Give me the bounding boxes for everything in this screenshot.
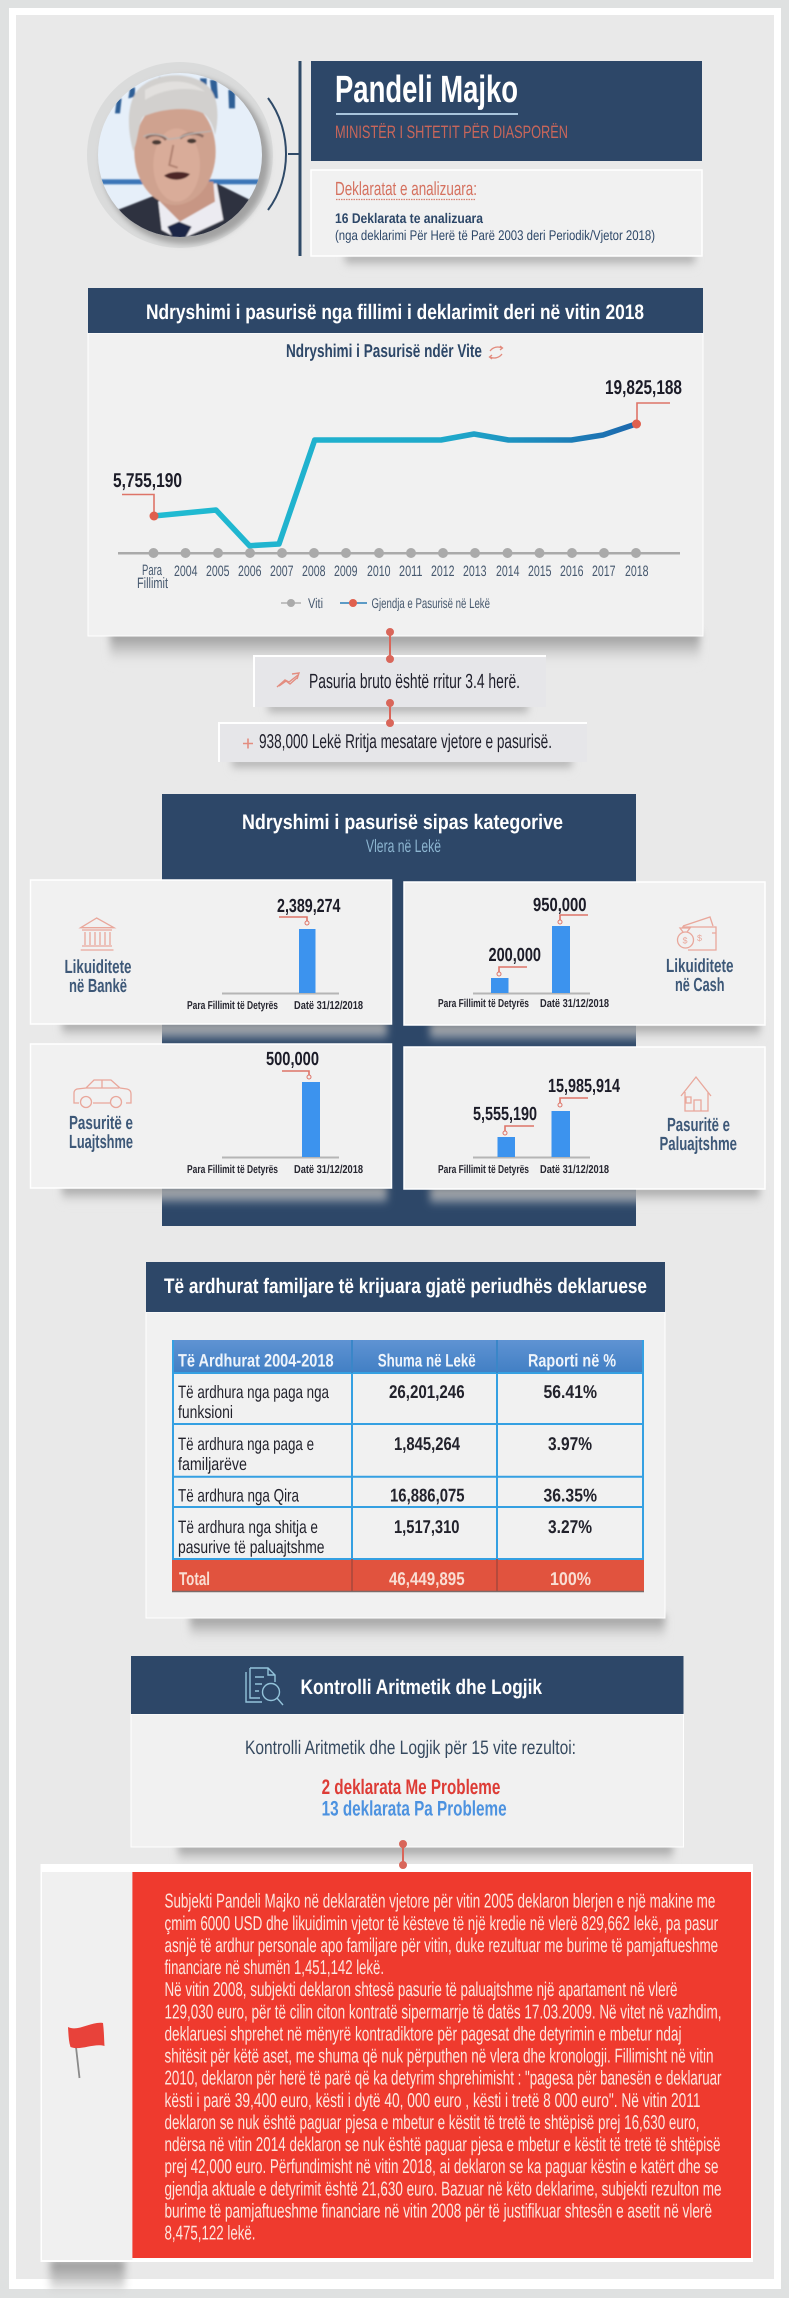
legend	[281, 595, 490, 611]
row: family salary: Të ardhura nga paga e	[178, 1434, 314, 1454]
row: rent	[178, 1485, 597, 1506]
icon: wallet with cash: $	[682, 936, 688, 946]
x axis labels: Para	[142, 562, 162, 579]
category label: në Bankë	[69, 976, 127, 997]
section heading: Ndryshimi i pasurisë sipas kategorive	[242, 811, 563, 834]
shadow below findings card	[50, 2260, 125, 2298]
category label: në Cash	[675, 975, 724, 996]
row: total: 100%	[550, 1568, 591, 1589]
declarations with problems: 2 deklarata Me Probleme	[322, 1776, 500, 1799]
bar chart: Para Fillimit të Detyrës	[187, 1164, 278, 1176]
start value callout	[113, 470, 182, 520]
row: rent: 36.35%	[544, 1485, 597, 1506]
bar chart: 950,000	[533, 895, 586, 916]
bar chart: Datë 31/12/2018	[540, 998, 609, 1010]
category label: Likuiditete	[64, 957, 132, 978]
line chart	[113, 377, 682, 611]
card: cash liquidity	[404, 882, 765, 1025]
row: family salary	[178, 1433, 592, 1474]
section: family income	[146, 1262, 665, 1618]
category label: Luajtshme	[69, 1132, 133, 1153]
table header: Të Ardhurat 2004-2018	[178, 1351, 334, 1371]
callout: gross wealth growth	[253, 655, 546, 707]
name panel	[311, 61, 702, 161]
x axis labels: 2011	[399, 563, 422, 580]
row: family salary: 1,845,264	[394, 1433, 461, 1454]
bar chart: 5,555,190	[473, 1104, 537, 1125]
findings text panel: financiare në shumën 1,451,142 lekë.	[164, 1957, 384, 1979]
row: family salary: 3.97%	[548, 1433, 592, 1454]
x axis labels	[137, 562, 648, 592]
findings text panel: 8,475,122 lekë.	[164, 2223, 256, 2245]
declarations period: (nga deklarimi Për Herë të Parë 2003 deri Periodik/Vjetor 2018)	[335, 227, 655, 243]
icon: house	[681, 1077, 711, 1111]
x axis labels: 2004	[174, 563, 198, 580]
row: total: 46,449,895	[389, 1568, 465, 1589]
connector pins	[386, 628, 394, 726]
section subtitle: Vlera në Lekë	[366, 836, 441, 856]
callout: average yearly growth	[218, 722, 587, 762]
row: total: Total	[179, 1568, 210, 1589]
icon: bank	[81, 918, 114, 950]
shadow below callout 1	[268, 704, 528, 718]
x axis labels: 2016	[560, 563, 584, 580]
row: property sales: 3.27%	[548, 1516, 592, 1537]
start value callout: 5,755,190	[113, 470, 182, 492]
photo medallion	[87, 62, 273, 262]
row: official salary	[178, 1381, 597, 1422]
icon: red flag	[68, 2023, 104, 2078]
card: real estate	[404, 1047, 765, 1189]
declarations count: 16 Deklarata te analizuara	[335, 210, 483, 226]
shadow below callout 2	[232, 759, 572, 773]
x axis labels: 2013	[463, 563, 486, 580]
icon: car	[74, 1080, 131, 1108]
income table	[172, 1340, 644, 1592]
bar chart	[438, 1076, 620, 1176]
legend: Viti	[308, 595, 323, 611]
portrait photo	[98, 73, 262, 237]
section: wealth change chart	[88, 288, 703, 636]
table header	[172, 1340, 644, 1373]
card: movable assets	[30, 1044, 392, 1188]
check summary: Kontrolli Aritmetik dhe Logjik për 15 vite rezultoi:	[245, 1737, 576, 1759]
bar chart: Datë 31/12/2018	[540, 1164, 609, 1176]
declarations without problems: 13 deklarata Pa Probleme	[322, 1798, 507, 1821]
section heading: Ndryshimi i pasurisë nga fillimi i deklarimit deri në vitin 2018	[146, 301, 644, 324]
end value callout	[605, 377, 682, 428]
bar chart: 15,985,914	[548, 1076, 620, 1097]
row: rent: Të ardhura nga Qira	[178, 1486, 300, 1506]
icon: refresh	[490, 346, 502, 359]
declarations heading: Deklaratat e analizuara:	[335, 179, 477, 200]
bar chart	[187, 1049, 363, 1176]
row: official salary: 26,201,246	[389, 1381, 465, 1402]
category label	[666, 956, 734, 996]
role: MINISTËR I SHTETIT PËR DIASPORËN	[335, 122, 568, 142]
bar chart	[187, 896, 363, 1012]
x axis labels: 2014	[496, 563, 520, 580]
x axis labels: 2006	[238, 563, 262, 580]
icon: plus	[243, 738, 253, 748]
connector bracket	[268, 61, 300, 256]
x axis labels: 2005	[206, 563, 230, 580]
category label	[64, 957, 132, 997]
icon: trend arrow	[277, 673, 299, 687]
x axis labels: Fillimit	[137, 575, 169, 592]
section: findings	[40, 1864, 753, 2262]
shadow below declarations panel	[345, 254, 695, 270]
row: total	[179, 1568, 591, 1589]
section heading: Të ardhurat familjare të krijuara gjatë periudhës deklaruese	[164, 1275, 647, 1298]
category label: Likuiditete	[666, 956, 734, 977]
legend: Gjendja e Pasurisë në Lekë	[372, 595, 490, 611]
wealth line	[154, 424, 636, 546]
table header: Shuma në Lekë	[378, 1351, 476, 1371]
x axis labels: 2010	[367, 563, 390, 580]
x axis labels: 2007	[270, 563, 294, 580]
row: official salary: funksioni	[178, 1402, 233, 1422]
callout: average yearly growth: 938,000 Lekë Rritja mesatare vjetore e pasurisë.	[259, 731, 552, 753]
icon: wallet with cash: $	[697, 933, 702, 943]
bar chart: 2,389,274	[277, 896, 341, 917]
bar chart: Para Fillimit të Detyrës	[438, 998, 529, 1010]
section heading	[131, 1656, 684, 1714]
header: profile	[87, 61, 702, 270]
row: property sales: Të ardhura nga shitja e	[178, 1517, 318, 1537]
shadow below income panel	[190, 1615, 665, 1643]
connector pin to findings	[400, 1840, 406, 1868]
section heading	[146, 1262, 665, 1312]
section: wealth by category	[162, 794, 636, 1226]
bar chart: 200,000	[488, 945, 541, 966]
bar chart: Datë 31/12/2018	[294, 1000, 363, 1012]
bar chart: 500,000	[266, 1049, 319, 1070]
x axis labels: 2015	[528, 563, 552, 580]
row: rent: 16,886,075	[390, 1485, 465, 1506]
end value callout: 19,825,188	[605, 377, 682, 399]
shadow below arithmetic panel	[178, 1844, 673, 1866]
table grid	[172, 1340, 644, 1592]
table total row background	[172, 1559, 644, 1592]
chart title: Ndryshimi i Pasurisë ndër Vite	[286, 340, 482, 361]
row: property sales: pasurive të paluajtshme	[178, 1537, 324, 1557]
bar chart: Para Fillimit të Detyrës	[187, 1000, 278, 1012]
callout: gross wealth growth: Pasuria bruto është rritur 3.4 herë.	[309, 670, 520, 693]
category label: Pasuritë e	[667, 1115, 730, 1136]
row: family salary: familjarëve	[178, 1454, 247, 1474]
row: official salary: Të ardhura nga paga nga	[178, 1382, 330, 1402]
category label	[69, 1113, 133, 1153]
findings text panel	[132, 1872, 751, 2258]
declarations panel	[311, 170, 702, 256]
x axis labels: 2008	[302, 563, 326, 580]
row: official salary: 56.41%	[544, 1381, 597, 1402]
section heading	[88, 288, 703, 333]
name: Pandeli Majko	[335, 69, 518, 111]
section: arithmetic and logic check	[131, 1656, 684, 1847]
bar chart: Para Fillimit të Detyrës	[438, 1164, 529, 1176]
x axis labels: 2009	[334, 563, 358, 580]
shadows below category cards	[62, 1021, 760, 1206]
row: property sales	[178, 1516, 592, 1557]
bar chart: Datë 31/12/2018	[294, 1164, 363, 1176]
icon: wallet with cash	[678, 917, 716, 950]
x axis labels: 2018	[625, 563, 648, 580]
table header: Raporti në %	[528, 1351, 616, 1371]
category label: Paluajtshme	[660, 1134, 737, 1155]
category label: Pasuritë e	[69, 1113, 133, 1134]
icon: document with magnifier	[246, 1668, 283, 1705]
card: bank liquidity	[30, 880, 392, 1024]
section heading: Kontrolli Aritmetik dhe Logjik	[300, 1676, 542, 1699]
shadow below chart panel	[110, 632, 700, 666]
category label	[660, 1115, 737, 1155]
bar chart	[438, 895, 609, 1010]
row: property sales: 1,517,310	[394, 1516, 460, 1537]
x axis labels: 2012	[431, 563, 454, 580]
x axis labels: 2017	[592, 563, 616, 580]
